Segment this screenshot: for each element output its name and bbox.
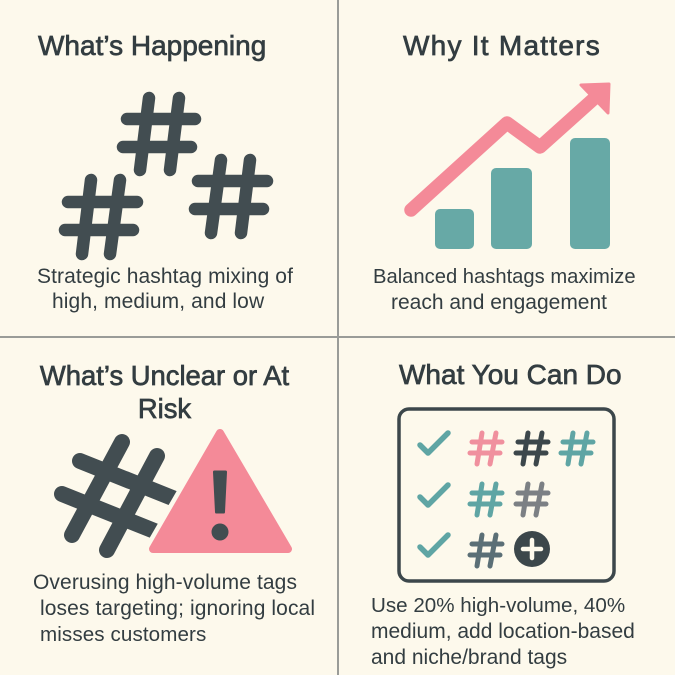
- text: why it matters body: reach and engagement: [391, 291, 607, 314]
- icon: hashtag with warning triangle: [62, 433, 288, 550]
- heading: Why It Matters: Why It Matters: [403, 30, 601, 61]
- heading: What You Can Do: What You Can Do: [399, 359, 622, 390]
- icon: checklist of hashtags: [399, 409, 614, 581]
- heading: What's Unclear or At Risk: What’s Unclear or At: [40, 360, 289, 391]
- text: unclear or risk body: loses targeting; ignoring local: [40, 597, 315, 620]
- text: what's happening body: Strategic hashtag mixing of: [37, 265, 293, 288]
- text: unclear or risk body: misses customers: [40, 623, 206, 646]
- text: unclear or risk body: Overusing high-volume tags: [33, 571, 297, 594]
- text: what you can do body: medium, add location-based: [371, 620, 635, 643]
- text: what's happening body: [37, 265, 293, 313]
- text: what you can do body: [371, 594, 635, 669]
- text: what you can do body: Use 20% high-volume, 40%: [371, 594, 625, 617]
- text: what's happening body: high, medium, and low: [52, 290, 264, 313]
- text: why it matters body: [373, 266, 636, 314]
- heading: What's Unclear or At Risk: Risk: [138, 393, 191, 424]
- text: what you can do body: and niche/brand tags: [371, 646, 567, 669]
- text: unclear or risk body: [33, 571, 315, 646]
- heading: What's Happening: What’s Happening: [38, 30, 266, 61]
- chart: growth bars and arrow: [411, 84, 610, 249]
- icon: three hashtags: [65, 98, 267, 254]
- text: why it matters body: Balanced hashtags maximize: [373, 266, 636, 288]
- heading: What's Unclear or At Risk: [40, 360, 290, 424]
